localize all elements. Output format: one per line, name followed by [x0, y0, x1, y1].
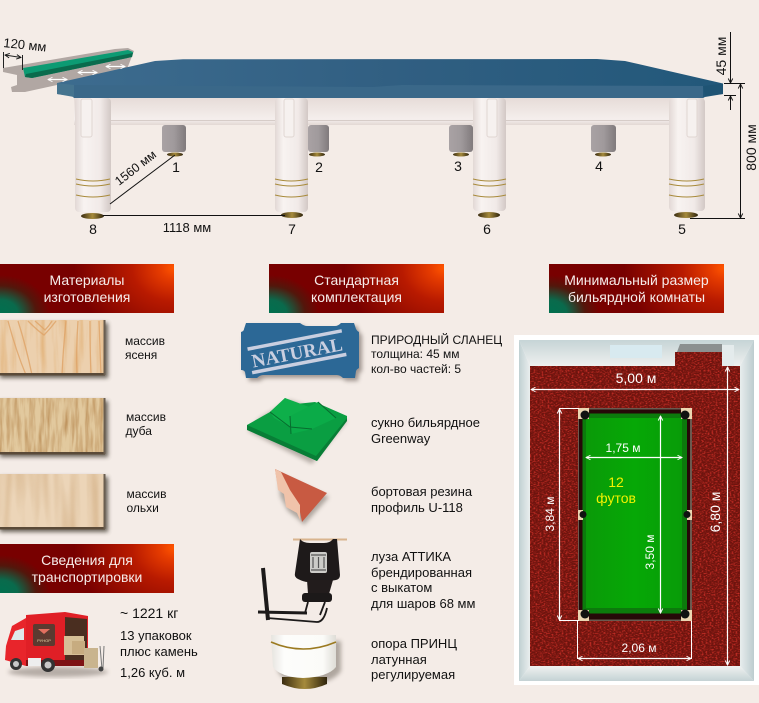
leg numbers: 3 [454, 158, 462, 174]
dimension: 120 mm [3, 35, 47, 70]
room plan [514, 335, 759, 685]
dimension: 800 mm: 800 мм [743, 124, 759, 171]
dimension: 800 mm [690, 84, 759, 218]
support label: регулируемая [371, 667, 455, 682]
heading: materials: Материалы [50, 272, 124, 288]
heading: minimum room size [549, 264, 724, 313]
heading: materials: изготовления [44, 289, 130, 305]
icon: natural slate plaque [241, 323, 362, 381]
2,06 m dimension: 2,06 м [622, 641, 656, 655]
heading: standard equipment: Стандартная [314, 272, 399, 288]
support label: опора ПРИНЦ [371, 636, 457, 651]
3,50 m dimension: 3,50 м [643, 535, 657, 569]
dimension: 1118 mm: 1118 мм [163, 220, 211, 235]
slate details: ПРИРОДНЫЙ СЛАНЕЦ [371, 332, 502, 347]
leg numbers: 7 [288, 221, 296, 237]
cloth label: сукно бильярдное [371, 415, 480, 430]
leg numbers: 4 [595, 158, 603, 174]
1,75 m dimension [586, 441, 682, 458]
leg numbers: 5 [678, 221, 686, 237]
walls [519, 340, 754, 681]
slate details: кол-во частей: 5 [371, 362, 461, 376]
leg numbers: 1 [172, 159, 180, 175]
rubber label [371, 484, 473, 515]
cushion rail profile [3, 48, 134, 92]
icon: rubber cushion profile [275, 469, 329, 525]
slate details [371, 332, 502, 376]
icon: branded pocket with ball return [258, 539, 347, 622]
heading: minimum room size: бильярдной комнаты [568, 289, 705, 305]
pocket label: с выкатом [371, 580, 432, 595]
cloth label: Greenway [371, 431, 431, 446]
slate table top [57, 59, 723, 98]
heading: transport details: Сведения для [41, 552, 133, 568]
table top view [578, 408, 692, 621]
leg numbers [89, 158, 686, 237]
label: массив [126, 487, 167, 501]
material: oak [0, 398, 166, 457]
icon: delivery truck [5, 612, 108, 677]
icon: brass leg support [271, 635, 341, 689]
3,84 m dimension [543, 408, 579, 620]
apron [74, 97, 704, 125]
cloth label [371, 415, 480, 446]
pocket label: луза АТТИКА [371, 549, 451, 564]
6,80 m dimension: 6,80 м [707, 492, 723, 532]
transport details: 13 упаковок [120, 628, 192, 643]
heading: transport details: транспортировки [32, 569, 142, 585]
support label [371, 636, 457, 682]
heading: materials [0, 264, 174, 313]
rail width arrows [48, 66, 125, 80]
dimension: 120 mm: 120 мм [3, 35, 47, 55]
label: ясеня [125, 348, 157, 362]
snooker table side view [57, 59, 723, 219]
wall niche details [610, 344, 734, 366]
pocket label: брендированная [371, 565, 472, 580]
label: массив [126, 410, 166, 424]
carpet floor [530, 352, 740, 666]
pocket label [371, 549, 475, 611]
material: ash [0, 320, 165, 378]
pocket label: для шаров 68 мм [371, 596, 475, 611]
dimension: 1560 mm: 1560 мм [112, 147, 159, 188]
heading: standard equipment [269, 264, 444, 313]
dimension: 45 mm: 45 мм [713, 37, 729, 75]
5,00 m dimension: 5,00 м [616, 370, 656, 386]
rubber label: профиль U-118 [371, 500, 463, 515]
leg numbers: 2 [315, 159, 323, 175]
rubber label: бортовая резина [371, 484, 473, 499]
heading: transport details [0, 544, 174, 593]
leg numbers: 8 [89, 221, 97, 237]
1,75 m dimension: 1,75 м [606, 441, 640, 455]
white frame [514, 335, 759, 685]
support label: латунная [371, 652, 427, 667]
front legs [75, 98, 705, 219]
material: alder [0, 474, 167, 532]
icon: natural slate plaque: NATURAL [250, 334, 344, 373]
leg numbers: 6 [483, 221, 491, 237]
heading: standard equipment: комплектация [311, 289, 402, 305]
dimension: 1560 mm [110, 147, 175, 204]
label: массив [125, 334, 165, 348]
transport details: ~ 1221 кг [120, 605, 178, 621]
transport details [120, 605, 198, 680]
icon: folded green cloth [247, 398, 347, 464]
label: ольхи [126, 501, 159, 515]
label: дуба [126, 424, 152, 438]
table size label: футов [596, 490, 636, 506]
heading: minimum room size: Минимальный размер [564, 272, 709, 288]
transport details: плюс камень [120, 644, 198, 659]
dimension: 45 mm [713, 32, 745, 110]
table size label: 12 [608, 474, 624, 490]
3,84 m dimension: 3,84 м [543, 497, 557, 531]
rear legs [162, 125, 616, 156]
slate details: толщина: 45 мм [371, 347, 460, 361]
icon: delivery truck: РУНОР [37, 638, 51, 643]
pockets [578, 408, 692, 621]
transport details: 1,26 куб. м [120, 665, 185, 680]
2,06 m dimension [578, 621, 692, 659]
